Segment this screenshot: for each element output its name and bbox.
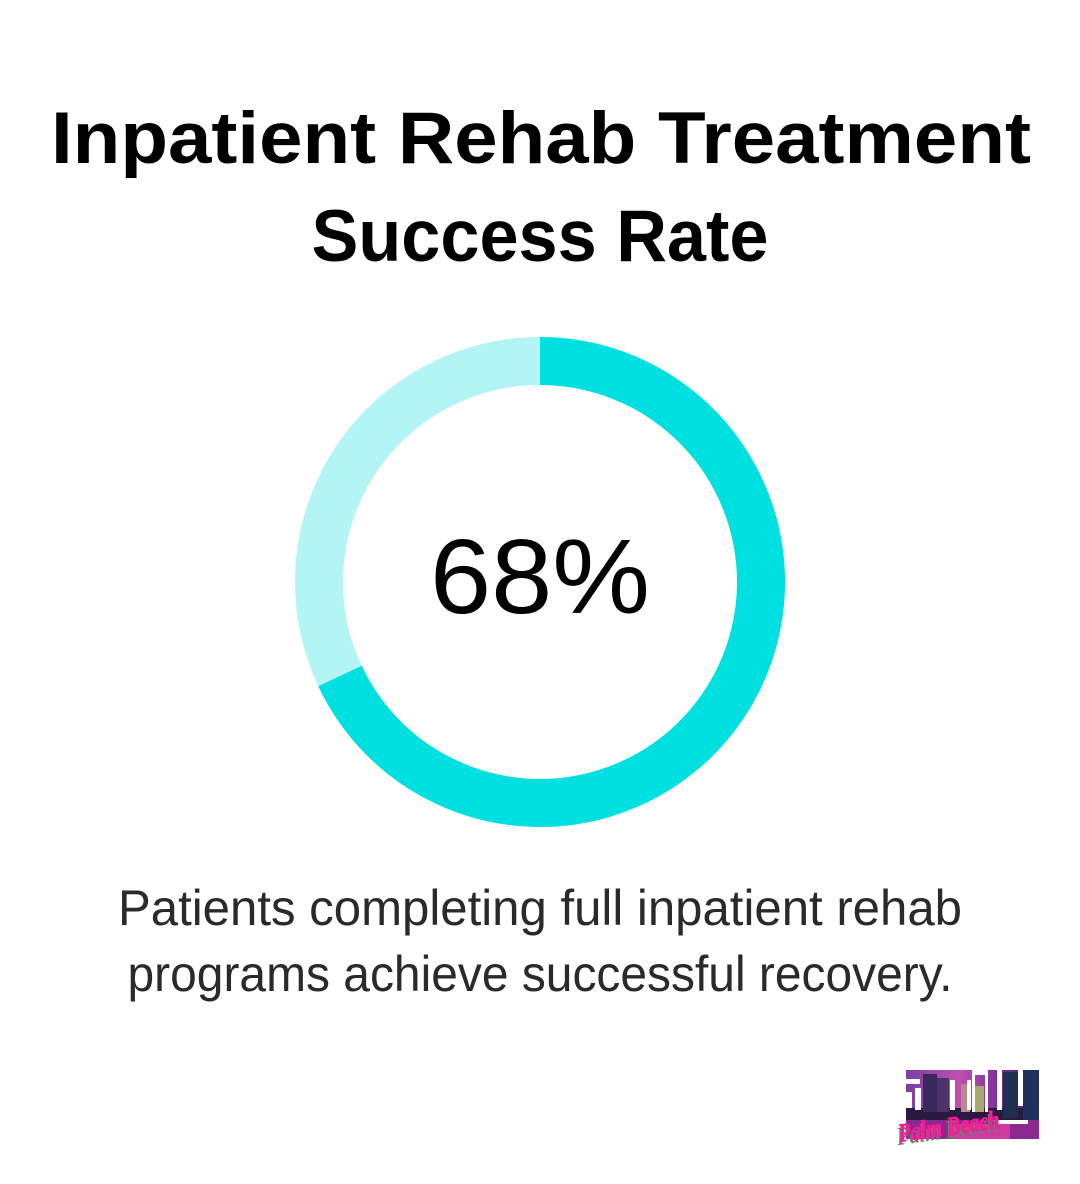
description text: programs achieve successful recovery. <box>128 946 952 1002</box>
logo script: Palm Beach: Palm Beach <box>895 1105 1001 1148</box>
donut track: remaining 32% <box>319 361 761 803</box>
center value: 68% <box>430 518 650 636</box>
donut arc: 68% success <box>340 361 761 803</box>
logo wordmark cutouts <box>906 1070 1028 1124</box>
title: Inpatient Rehab Treatment <box>51 98 1031 179</box>
donut chart: 68% <box>319 361 761 803</box>
title <box>51 98 1031 277</box>
title: Success Rate <box>312 196 768 277</box>
logo script: Palm Beach: Palm Beach <box>894 1108 1000 1151</box>
logo: amity Palm Beach <box>894 1070 1039 1151</box>
description text <box>118 880 962 1002</box>
description text: Patients completing full inpatient rehab <box>118 880 962 936</box>
